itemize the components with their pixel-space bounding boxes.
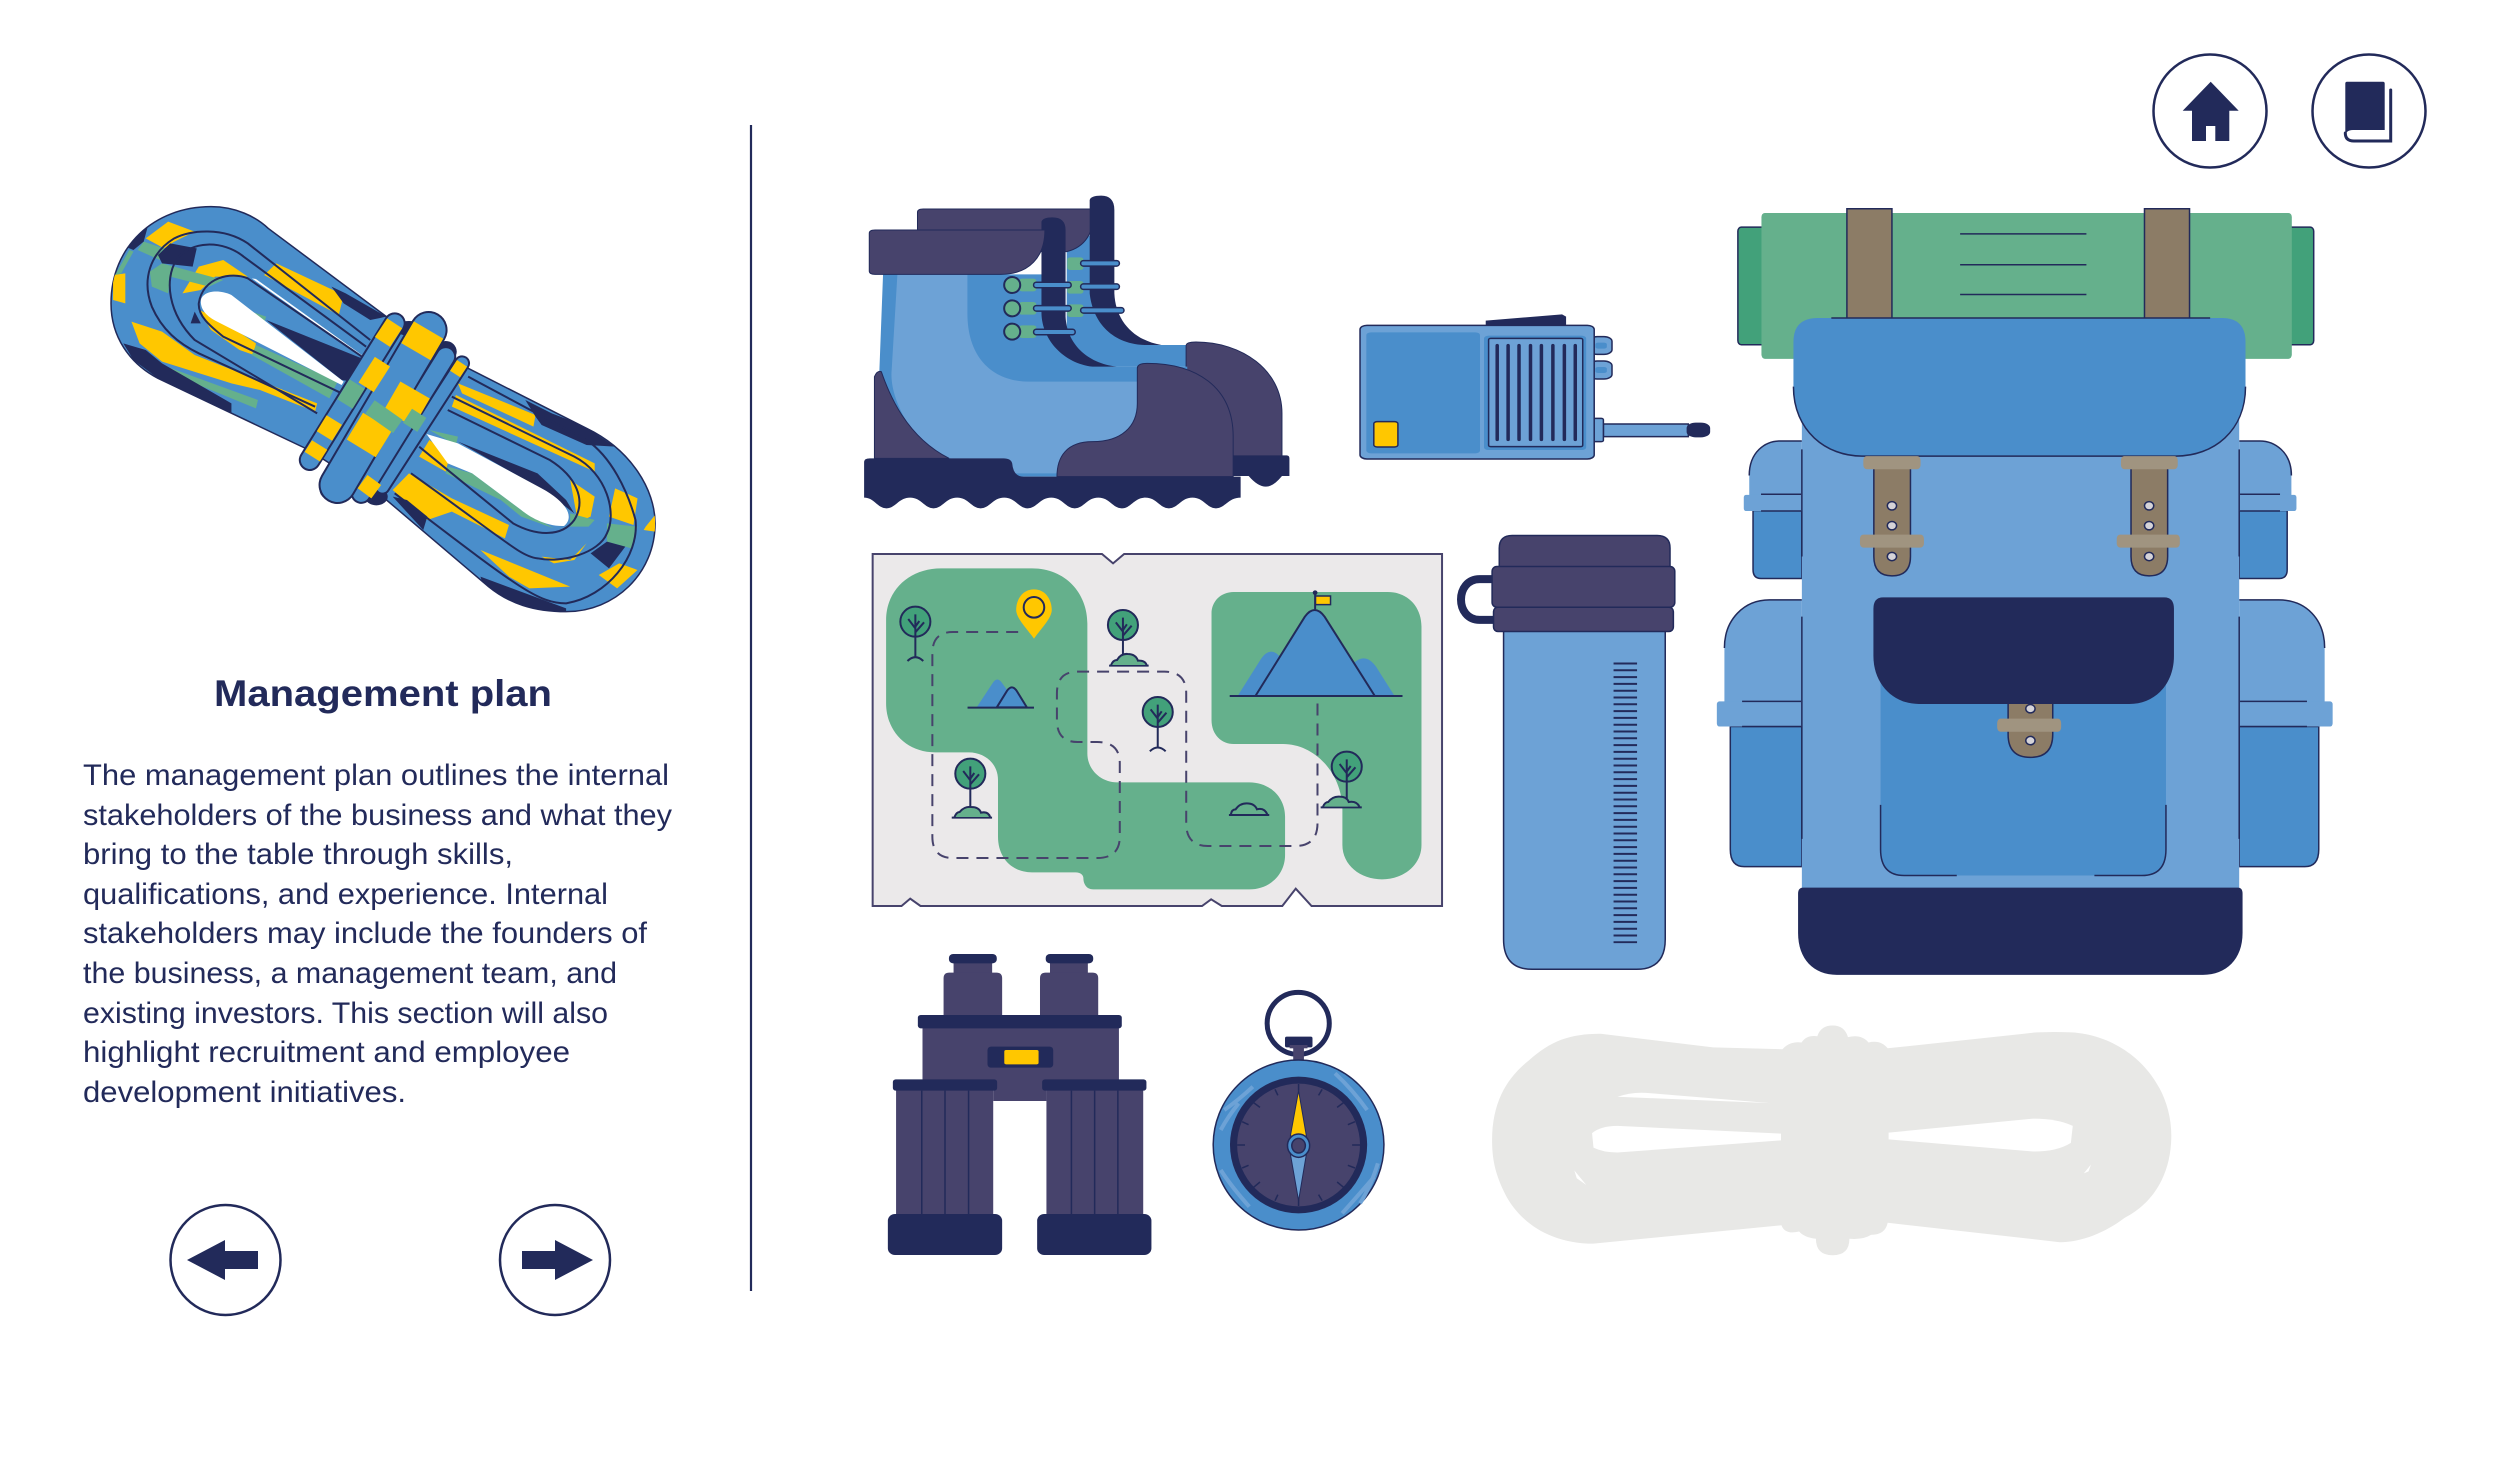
body text: highlight recruitment and employee <box>83 1036 570 1069</box>
illustration: compass <box>1213 992 1384 1230</box>
body text <box>83 759 672 1109</box>
measuring scale <box>1614 662 1637 943</box>
summit mountain with flag <box>1230 590 1403 696</box>
illustration: water bottle <box>1461 536 1675 969</box>
top flap <box>1793 318 2246 456</box>
body text: The management plan outlines the internal <box>83 759 669 792</box>
body text: existing investors. This section will also <box>83 997 608 1030</box>
divider line <box>750 125 752 1291</box>
button: next arrow <box>500 1205 610 1315</box>
bottom panel <box>1798 888 2243 975</box>
body text: development initiatives. <box>83 1076 406 1109</box>
tree 5 <box>1321 752 1362 807</box>
tree 1 <box>900 607 930 661</box>
pack body <box>1802 337 2239 891</box>
illustration: backpack <box>1717 209 2333 975</box>
button: previous arrow <box>170 1205 280 1315</box>
left buckle strap <box>1860 456 1924 576</box>
body text: the business, a management team, and <box>83 957 617 990</box>
tree 4 <box>952 759 992 818</box>
body text: bring to the table through skills, <box>83 838 513 871</box>
bushes <box>1229 803 1269 815</box>
small mountains <box>968 679 1034 708</box>
side pockets <box>1717 441 2333 867</box>
grey rope placeholder silhouette <box>1492 1026 2171 1255</box>
illustration: walkie talkie radio <box>1360 314 1710 459</box>
illustration: binoculars <box>888 954 1151 1255</box>
button: book <box>2312 54 2426 168</box>
illustration: hiking boots <box>864 196 1289 508</box>
sleeping mat <box>1738 209 2314 359</box>
rope binding bands <box>310 321 462 505</box>
rope openings <box>201 278 569 526</box>
rope coil outlines <box>148 231 636 603</box>
dashed route <box>932 632 1317 858</box>
body text: stakeholders may include the founders of <box>83 917 648 950</box>
front boot <box>864 217 1241 508</box>
body text: qualifications, and experience. Internal <box>83 878 608 911</box>
tree 2 <box>1108 610 1149 666</box>
heading: Management plan <box>214 673 552 714</box>
body text: stakeholders of the business and what they <box>83 799 672 832</box>
tree 3 <box>1143 697 1173 751</box>
coloured rope illustration <box>111 207 655 613</box>
rear boot <box>917 196 1289 487</box>
front pocket <box>1873 597 2174 876</box>
right buckle strap <box>2117 456 2180 576</box>
button: home <box>2154 54 2266 168</box>
location pin <box>1016 589 1052 639</box>
illustration: trail map <box>873 554 1442 906</box>
